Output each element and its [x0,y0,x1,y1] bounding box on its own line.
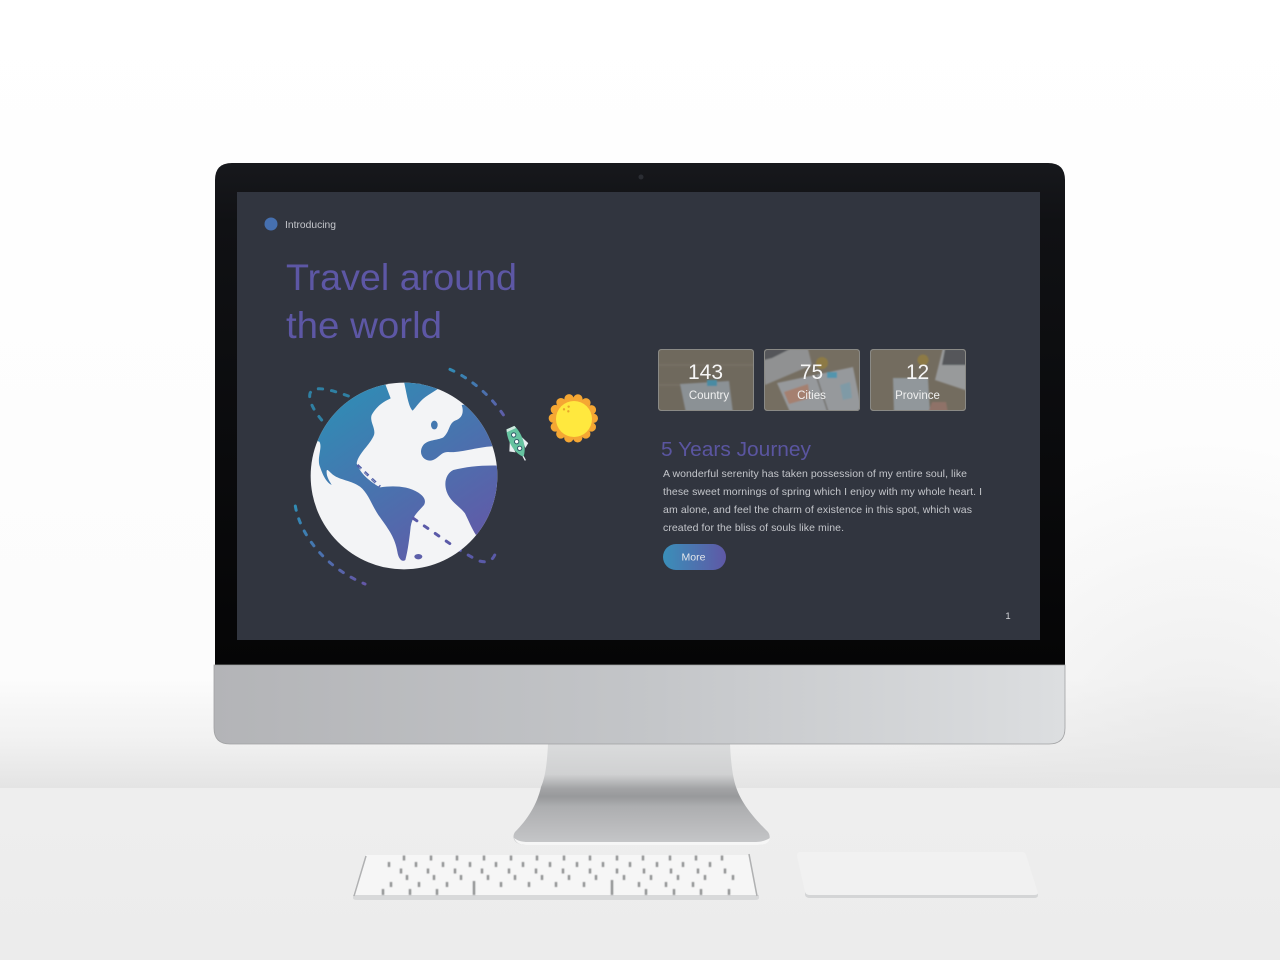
section tag: Introducing: Introducing [285,219,336,231]
keyboard [353,854,759,900]
stat card: 143 Country: Country [689,390,729,402]
stat card: 75 Cities [762,349,862,412]
icon: sun [553,398,593,438]
trackpad [797,852,1038,898]
body text: these sweet mornings of spring which I enjoy with my whole heart. I [663,486,982,498]
monitor stand [513,744,770,845]
illustration: globe and orbit [295,369,593,584]
icon: rocket [501,424,534,465]
section tag: Introducing [264,218,336,231]
stat card: 12 Province: 12 [906,361,929,384]
title: Travel around [286,257,517,298]
monitor [214,163,1065,744]
body text: created for the bliss of souls like mine. [663,522,844,534]
stat card: 12 Province: Province [895,390,940,402]
orbit dashes [295,369,507,584]
stat card: 75 Cities: 75 [800,361,823,384]
body text: A wonderful serenity has taken possession of my entire soul, like [663,468,967,480]
monitor chin [214,665,1065,744]
stat card: 75 Cities: Cities [797,390,826,402]
screen panel [237,192,1040,640]
monitor bezel [215,163,1065,665]
body text: am alone, and feel the charm of existence in this spot, which was [663,504,972,516]
stat card: 143 Country [658,349,754,413]
webcam [638,174,644,180]
title [286,257,517,346]
globe [310,380,503,569]
heading: 5 Years Journey: 5 Years Journey [661,439,811,461]
title: the world [286,305,442,346]
button: More: More [682,552,706,564]
stat card: 12 Province [870,348,968,413]
body text [663,468,982,534]
stat card: 143 Country: 143 [688,361,723,384]
key gaps [383,856,733,895]
button: More [663,544,726,570]
page number: 1 [1005,611,1011,622]
